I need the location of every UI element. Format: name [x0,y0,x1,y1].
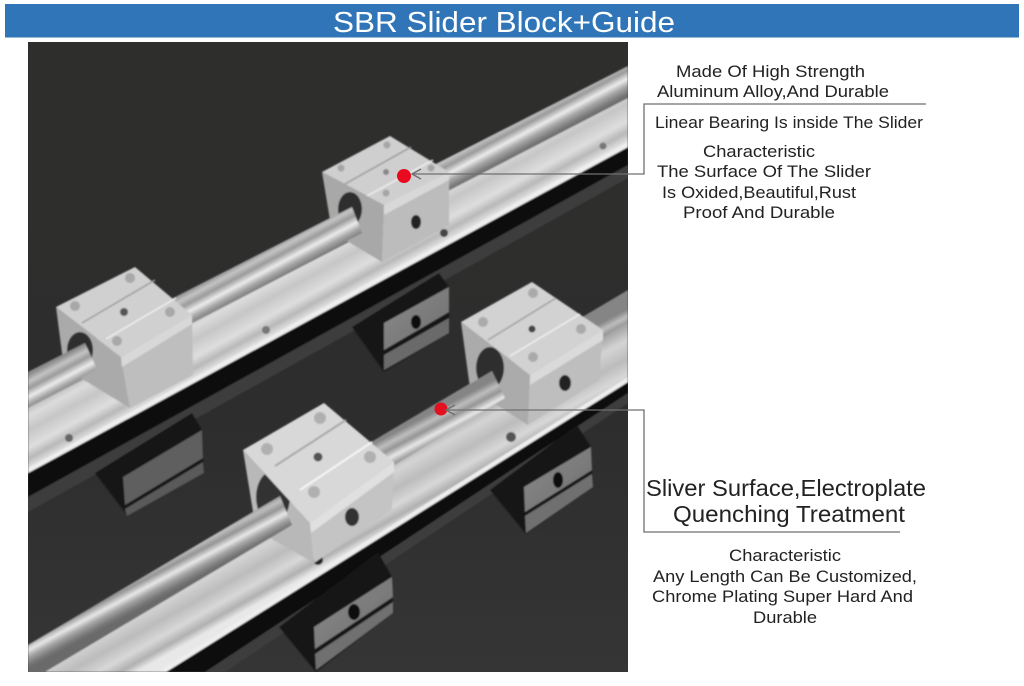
callout: guide characteristic: Characteristic [729,546,842,565]
callout: slider characteristic: Is Oxided,Beautiful,Rust [662,183,856,202]
carriage underside: lower right [490,425,593,534]
callout: slider characteristic: Proof And Durable [683,203,835,222]
slider block: left [55,266,193,408]
callout: guide characteristic: Durable [753,608,817,627]
callout: guide characteristic: Any Length Can Be Customized, [653,567,917,586]
callout: guide characteristic [652,546,917,627]
callout: material: Made Of High Strength [676,62,865,81]
product photo panel [28,42,628,682]
leader arrow: guide callout [446,405,900,532]
title bar [5,4,1019,39]
callout: surface treatment [646,475,926,527]
callout: linear bearing: Linear Bearing Is inside The Slider [655,113,923,132]
slider block: left front [55,402,395,666]
upper guide rail [28,66,628,512]
callout: slider characteristic [657,142,871,222]
callout: slider characteristic: Characteristic [703,142,816,161]
carriage underside: upper right [352,273,449,372]
slider block: right front [394,281,604,466]
callout: guide characteristic: Chrome Plating Super Hard And [652,587,913,606]
red marker: guide rod [434,402,448,416]
red marker: slider [397,169,411,183]
carriage underside: upper left [95,413,204,516]
callout: slider characteristic: The Surface Of The Slider [657,162,871,181]
callout: surface treatment: Quenching Treatment [673,501,906,527]
carriage underside: lower left [279,552,393,672]
callout: material: Aluminum Alloy,And Durable [657,82,889,101]
callout: surface treatment: Sliver Surface,Electroplate [646,475,926,501]
lower guide rail [28,290,628,682]
callout: material [657,62,889,101]
title: SBR Slider Block+Guide [333,7,675,39]
leader arrow: slider callout [412,104,926,179]
slider block: far [321,135,450,262]
